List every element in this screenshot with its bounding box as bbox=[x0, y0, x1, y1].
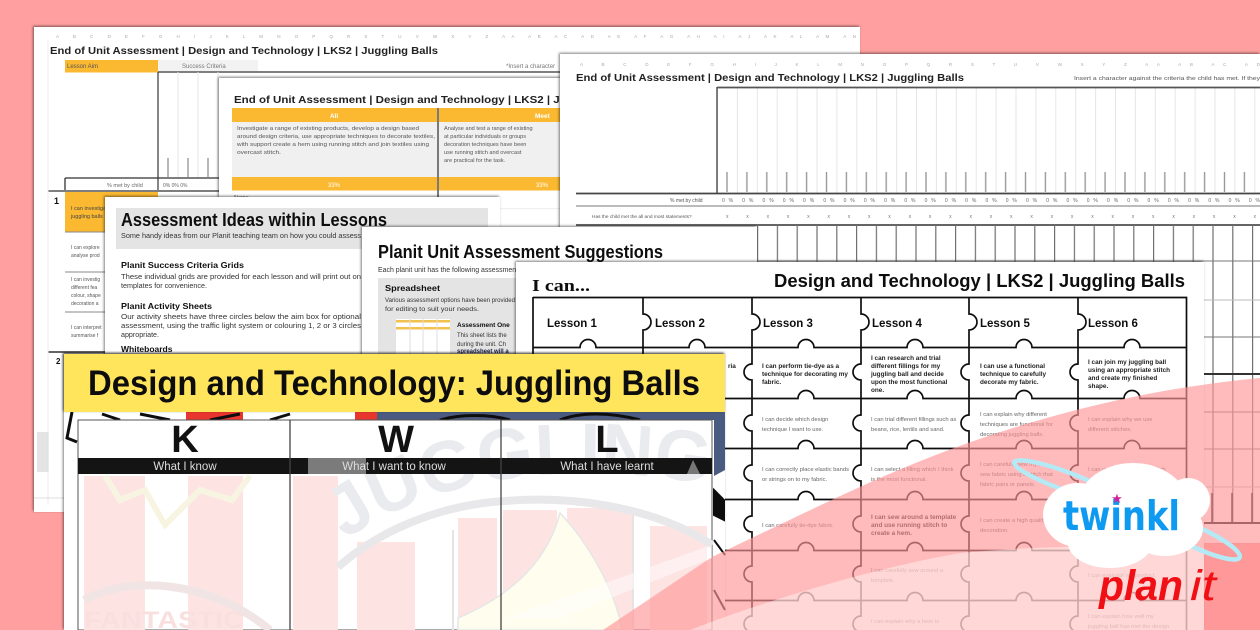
page: unit assessment suggestions: during the unit. Ch bbox=[457, 342, 506, 348]
statements row 1: I can perform tie-dye as a bbox=[762, 363, 840, 370]
page: assessment ideas within lessons: Our activity sheets have three circles below the aim box for optional bbox=[121, 314, 362, 321]
spreadsheet: lesson aims: I can investig bbox=[71, 277, 100, 283]
page: I can puzzle grid bbox=[516, 262, 1204, 630]
statements row 1: shape. bbox=[1088, 383, 1108, 390]
statements row 3: fabric pairs or panels. bbox=[980, 482, 1036, 488]
spreadsheet: all, meet, exceed: with support create a hem using running stitch and join textiles using bbox=[236, 142, 429, 148]
faint logo wording: JUGGLING bbox=[332, 424, 707, 534]
puzzle lines bbox=[533, 297, 1186, 630]
page: unit assessment suggestions: This sheet lists the bbox=[457, 333, 507, 339]
KWL chart bbox=[78, 419, 714, 630]
lesson headers: Lesson 6 bbox=[1088, 318, 1138, 330]
lesson headers: Lesson 2 bbox=[655, 318, 705, 330]
statements row 4: decoration. bbox=[980, 528, 1009, 534]
spreadsheet: lesson aims: juggling balls bbox=[70, 214, 103, 220]
spreadsheet: all, meet, exceed: 33% bbox=[328, 183, 341, 189]
statements row 1 bbox=[728, 355, 1170, 394]
spreadsheet: lesson aims: different fea bbox=[71, 285, 98, 291]
statements row 3 bbox=[762, 462, 1166, 488]
spreadsheet: all, meet, exceed: are practical for the task. bbox=[444, 158, 506, 164]
spreadsheet: all, meet, exceed: All bbox=[330, 113, 338, 120]
grid title: Design and Technology | LKS2 | Juggling Balls bbox=[774, 271, 1185, 291]
lesson headers: Lesson 3 bbox=[763, 318, 813, 330]
statements row 2 bbox=[762, 412, 1152, 438]
faint ring bbox=[338, 500, 712, 567]
statements row 1: technique to carefully bbox=[980, 371, 1046, 378]
statements row 2: beans, rice, lentils and sand. bbox=[871, 427, 945, 433]
cloud bbox=[1043, 463, 1210, 568]
faint stripes bbox=[84, 476, 707, 630]
page: assessment ideas within lessons: Some handy ideas from our Planit teaching team on how you could assess bbox=[121, 231, 361, 240]
spreadsheet: lesson aims: 1 bbox=[54, 196, 59, 206]
page: unit assessment suggestions: for editing to suit your needs. bbox=[385, 306, 479, 313]
spreadsheet: all, meet, exceed bbox=[219, 78, 632, 208]
statements row 2: different stitches. bbox=[1088, 427, 1132, 433]
statements row 1: I can join my juggling ball bbox=[1088, 359, 1166, 366]
child columns bbox=[717, 88, 1260, 193]
spreadsheet: lesson aims bbox=[34, 27, 860, 512]
swoosh overlay bbox=[507, 378, 1260, 630]
statements row 1: fabric. bbox=[762, 379, 781, 386]
lesson headers: Lesson 1 bbox=[547, 318, 597, 330]
title banner: Design and Technology: Juggling Balls bbox=[88, 364, 700, 403]
KWL chart: What I want to know bbox=[342, 461, 446, 473]
statements row 2: I can decide which design bbox=[762, 417, 828, 423]
spreadsheet: all, meet, exceed: Investigate a range of existing products, develop a design based bbox=[237, 126, 419, 132]
page: unit assessment suggestions bbox=[362, 227, 757, 367]
column letters: A B C D E F G H I J K L M N O P Q R S T U V W X Y Z AA AB AC AD AE AF AG AH AI AJ AK AL AM AN bbox=[56, 34, 856, 39]
spreadsheet: lesson aims: I can explore bbox=[71, 245, 100, 251]
lesson headers: Lesson 4 bbox=[872, 318, 922, 330]
faint yellow cone bbox=[458, 513, 622, 630]
statements rows 5 and 6 bbox=[871, 568, 1169, 630]
statements row 2: I can explain why different bbox=[980, 412, 1047, 418]
statements row 3: I can use an appropriate stitch bbox=[1088, 467, 1166, 473]
statements row 3: I can carefully sew my two bbox=[980, 462, 1048, 468]
column subtitle bar bbox=[78, 458, 712, 474]
page: unit assessment suggestions: spreadsheet will a bbox=[457, 349, 509, 355]
title banner bbox=[64, 354, 725, 412]
statements row 1: technique for decorating my bbox=[762, 371, 848, 378]
tracking sheet title: End of Unit Assessment | Design and Technology | LKS2 | Juggling Balls bbox=[576, 73, 964, 84]
statements row 1: I can use a functional bbox=[980, 363, 1045, 370]
spreadsheet: lesson aims: Success Criteria bbox=[182, 64, 226, 70]
pupil grid bbox=[757, 225, 1260, 523]
statements row 1: upon the most functional bbox=[871, 379, 948, 386]
spreadsheet: class tracking grid: 0% 0% 0% 0% 0% 0% 0% 0% 0% 0% 0% 0% 0% 0% 0% 0% 0% 0% 0% 0% 0% 0% 0% 0% 0% 0% 0% bbox=[722, 198, 1260, 204]
statements row 4: I can sew around a template bbox=[871, 514, 957, 521]
twinkl planit logo: it bbox=[1190, 562, 1218, 610]
page: assessment ideas within lessons bbox=[105, 197, 500, 367]
lesson headers bbox=[547, 318, 1138, 330]
spreadsheet: lesson aims: I can interpret bbox=[71, 325, 102, 331]
statements row 1: ria bbox=[728, 363, 736, 370]
twinkl planit logo bbox=[1011, 454, 1244, 610]
KWL chart: What I have learnt bbox=[560, 461, 654, 473]
statements row 1: and create my finished bbox=[1088, 375, 1157, 382]
column letters: A B C D E F G H I J K L M N O P Q R S T U V W X Y Z AA AB AC AD bbox=[580, 62, 1260, 67]
spreadsheet: all, meet, exceed: use running stitch and overcast bbox=[444, 150, 522, 156]
statements row 4: and use running stitch to bbox=[871, 522, 947, 529]
page: unit assessment suggestions: Assessment One bbox=[457, 322, 510, 329]
statements rows 5 and 6: I can explain why a hem is bbox=[871, 619, 939, 625]
spreadsheet title: End of Unit Assessment | Design and Technology | LKS2 | Juggling Balls bbox=[50, 46, 438, 57]
KWL chart: W bbox=[378, 419, 414, 461]
faint crown bbox=[105, 476, 250, 525]
I can heading: I can... bbox=[532, 276, 590, 295]
spreadsheet: all, meet, exceed: Name bbox=[234, 195, 249, 201]
lesson aim header bbox=[65, 60, 158, 72]
statements row 2: technique I want to use. bbox=[762, 427, 824, 433]
all column bbox=[232, 108, 437, 122]
statements rows 5 and 6: template. bbox=[871, 578, 895, 584]
statements row 1: one. bbox=[871, 387, 884, 394]
lesson row one bbox=[65, 192, 158, 232]
spreadsheet: lesson aims: *Insert a character bbox=[506, 64, 555, 70]
spreadsheet: lesson aims: analyse prod bbox=[71, 253, 100, 259]
artwork peeking out bbox=[714, 412, 725, 476]
statements rows 5 and 6: I can carefully sew around a bbox=[871, 568, 944, 574]
suggestions heading: Planit Unit Assessment Suggestions bbox=[378, 241, 663, 262]
KWL chart: L bbox=[595, 419, 619, 461]
statements rows 5 and 6: I can explain how well my bbox=[1088, 614, 1154, 620]
spreadsheet: lesson aims: 0% 0% 0% bbox=[163, 183, 188, 189]
whiteboards note: Whiteboards bbox=[121, 344, 173, 354]
statements row 3: I can correctly place elastic bands bbox=[762, 467, 849, 473]
all and most row: Has the child met the all and most statements? bbox=[592, 214, 692, 220]
statements row 3: I can select a filling which I think bbox=[871, 467, 954, 473]
activity sheets note: Planit Activity Sheets bbox=[121, 301, 212, 311]
lesson headers: Lesson 5 bbox=[980, 318, 1030, 330]
statements row 3: or strings on to my fabric. bbox=[762, 477, 827, 483]
planit wordmark: plan bbox=[1098, 562, 1183, 610]
KWL page backing with juggling artwork bbox=[64, 354, 725, 630]
statements row 4: I can create a high quality bbox=[980, 518, 1046, 524]
star: ★ bbox=[1111, 492, 1123, 507]
spreadsheet: lesson aims: summarise f bbox=[71, 333, 99, 339]
statements row 4: I can carefully tie-dye fabric. bbox=[762, 523, 835, 529]
spreadsheet: class tracking grid: x x x x x x x x x x x x x x x x x x x x x x x x x x x bbox=[726, 214, 1256, 220]
spreadsheet: all, meet, exceed: Analyse and test a range of existing bbox=[444, 126, 533, 132]
spreadsheet: lesson aims: Lesson Aim bbox=[67, 64, 98, 70]
spreadsheet note: Spreadsheet bbox=[385, 283, 440, 293]
spreadsheet: lesson aims: % met by child bbox=[107, 183, 143, 189]
spreadsheet: lesson aims: I can investigate bbox=[71, 206, 111, 212]
page heading: Assessment Ideas within Lessons bbox=[121, 209, 387, 230]
statements row 4 bbox=[762, 514, 1046, 537]
page: assessment ideas within lessons: These individual grids are provided for each lesson and will print out on bbox=[121, 274, 361, 281]
page: unit assessment suggestions: Each planit unit has the following assessment bbox=[378, 267, 518, 274]
statements row 1: decorate my fabric. bbox=[980, 379, 1039, 386]
spreadsheet: all, meet, exceed: at particular individuals or groups bbox=[444, 134, 526, 140]
page: unit assessment suggestions: Various assessment options have been provided bbox=[385, 297, 515, 304]
spreadsheet: class tracking grid bbox=[560, 54, 1260, 543]
percent row: % met by child bbox=[670, 198, 703, 204]
statements rows 5 and 6: juggling ball has met the design bbox=[1087, 624, 1169, 630]
spreadsheet: all, meet, exceed: Meet bbox=[535, 113, 551, 120]
statements row 2: techniques are functional for bbox=[980, 422, 1053, 428]
sheet title: End of Unit Assessment | Design and Technology | LKS2 | Juggling Balls bbox=[234, 94, 632, 106]
meet column bbox=[439, 108, 560, 122]
page: assessment ideas within lessons: appropriate. bbox=[121, 332, 159, 339]
spreadsheet: lesson aims: 2 bbox=[56, 357, 61, 366]
statements row 1: using an appropriate stitch bbox=[1088, 367, 1170, 374]
statements row 3: is the most functional. bbox=[871, 477, 927, 483]
twinkl wordmark: twinkl bbox=[1063, 492, 1180, 540]
statements row 3: sew fabric using a stitch that bbox=[980, 472, 1053, 478]
spreadsheet: lesson aims: colour, shape bbox=[71, 293, 101, 299]
spreadsheet: all, meet, exceed: around design criteria, use appropriate techniques to decorate textiles, bbox=[237, 134, 435, 140]
statements row 4: create a hem. bbox=[871, 530, 912, 537]
orbit rings bbox=[1011, 454, 1244, 567]
row selection marker bbox=[37, 432, 48, 472]
page: assessment ideas within lessons: assessment, using the traffic light system or colouring 1, 2 or 3 circles bbox=[121, 323, 362, 330]
spreadsheet: lesson aims: decoration a bbox=[71, 301, 99, 307]
success criteria note: Planit Success Criteria Grids bbox=[121, 260, 244, 270]
page: assessment ideas within lessons: templates for convenience. bbox=[121, 283, 207, 290]
spreadsheet: all, meet, exceed: 33% bbox=[536, 183, 549, 189]
spreadsheet: class tracking grid: Insert a character against the criteria the child has met. If they bbox=[1074, 76, 1260, 82]
KWL chart: What I know bbox=[153, 461, 217, 473]
statements row 2: I can explain why we use bbox=[1088, 417, 1152, 423]
statements row 2: decorating juggling balls. bbox=[980, 432, 1044, 438]
statements rows 5 and 6: I can evaluate my product. bbox=[1088, 573, 1156, 579]
column letters: K bbox=[171, 419, 199, 461]
spreadsheet: all, meet, exceed: decoration techniques have been bbox=[444, 142, 526, 148]
statements row 1: juggling ball and decide bbox=[870, 371, 944, 378]
statements row 2: I can trial different fillings such as bbox=[871, 417, 956, 423]
statements row 1: different fillings for my bbox=[871, 363, 941, 370]
statements row 1: I can research and trial bbox=[871, 355, 941, 362]
spreadsheet thumbnail bbox=[396, 319, 450, 359]
spreadsheet: all, meet, exceed: overcast stitch. bbox=[237, 150, 282, 156]
